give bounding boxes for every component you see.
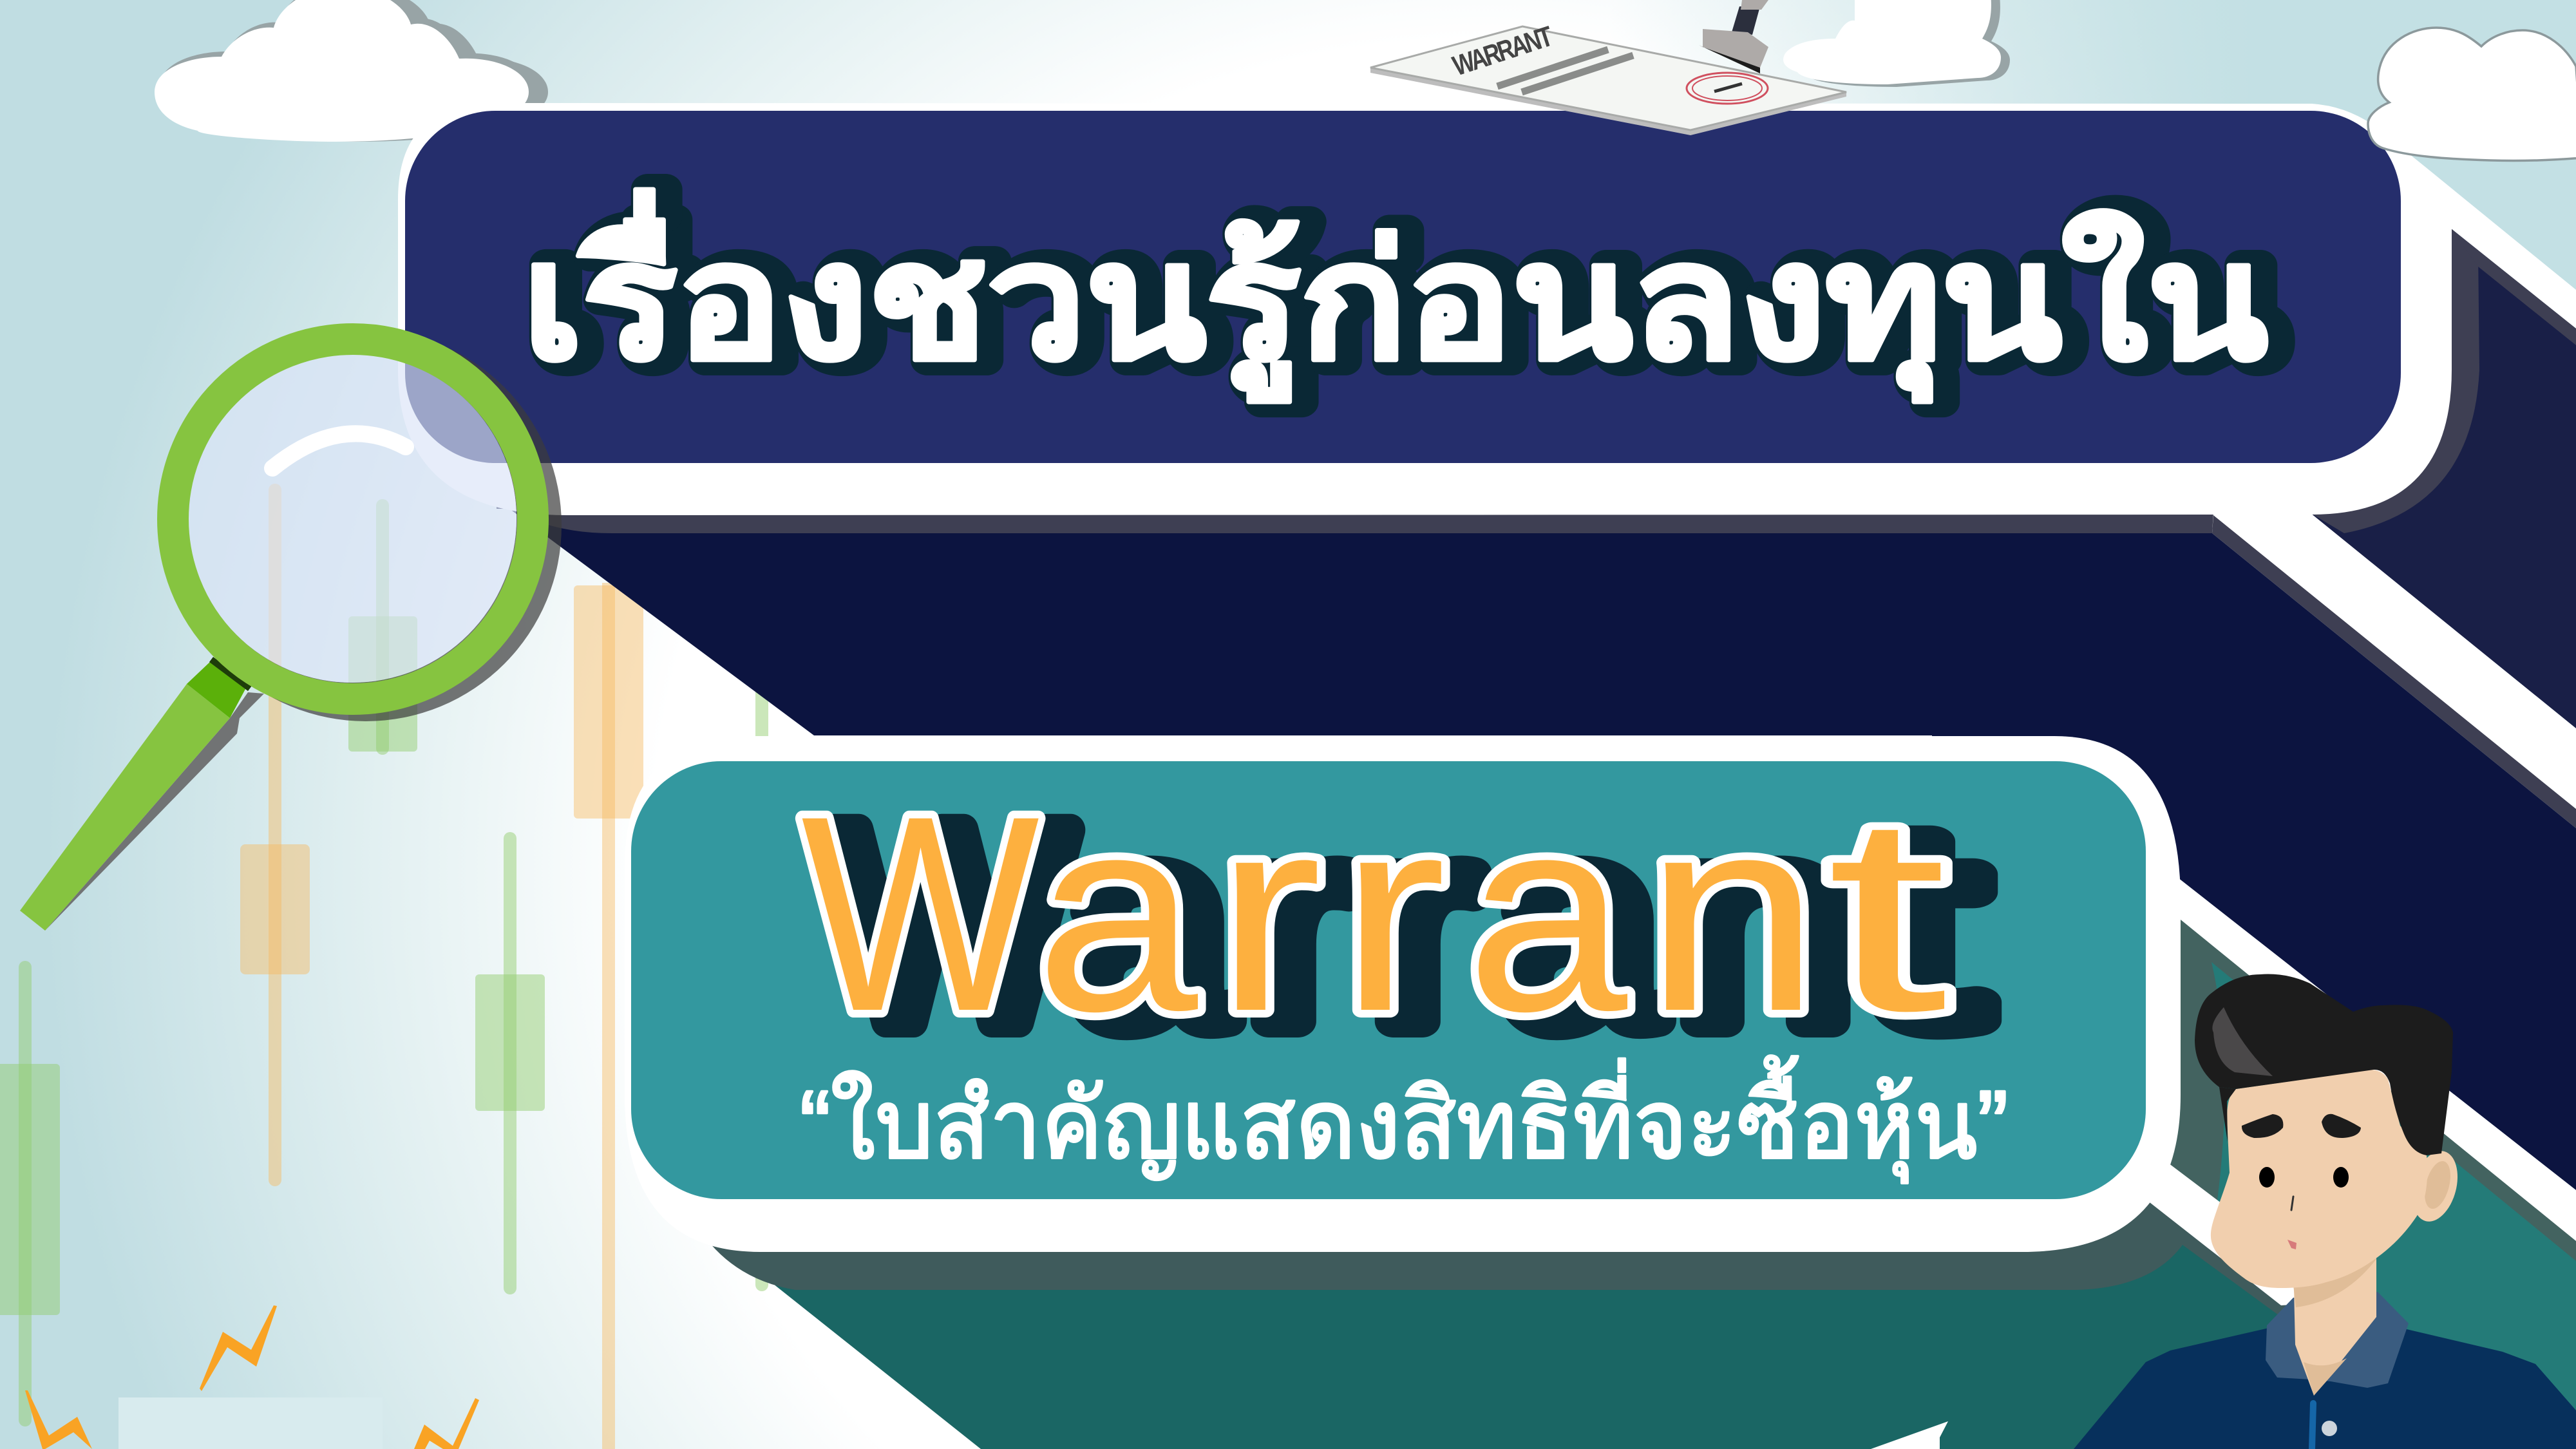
title text: เรื่องชวนรู้ก่อนลงทุนใน (522, 189, 2268, 402)
warrant heading shadow: r (1247, 770, 1354, 1081)
document label: WARRANT (1449, 21, 1557, 82)
neck (2293, 1249, 2376, 1396)
shirt (2074, 1328, 2576, 1449)
warrant heading: r (1339, 758, 1446, 1069)
panel: teal ribbon (694, 873, 2576, 1449)
icon: warrant document (1370, 21, 1846, 135)
title box shadow (497, 228, 2576, 828)
mouth (2287, 1240, 2297, 1249)
warrant heading shadow: W (833, 770, 1074, 1081)
panel: warrant box (625, 736, 2181, 1252)
warrant heading: r (1215, 758, 1322, 1069)
warrant heading shadow: a (1499, 770, 1662, 1081)
eyebrows (2242, 1114, 2361, 1138)
icon: stamp (1699, 0, 1768, 73)
warrant heading: a (1036, 758, 1200, 1069)
cloud: top left (155, 0, 548, 142)
white ribbon bands (2213, 122, 2576, 809)
hair (2195, 974, 2453, 1155)
panel: upper right dark stripe (2311, 228, 2576, 728)
cloud: top right (2368, 28, 2576, 161)
panel: navy ribbon (497, 499, 2576, 1190)
warrant heading: W (801, 758, 1042, 1069)
face (2211, 1070, 2427, 1288)
subtitle: “ใบสำคัญแสดงสิทธิที่จะซื้อหุ้น” (800, 1056, 2008, 1184)
icon: lightning bolts (25, 1305, 479, 1449)
nose (2291, 1197, 2293, 1210)
character: man (2074, 974, 2576, 1449)
warrant heading shadow: t (1859, 770, 1981, 1081)
collar (2266, 1292, 2409, 1388)
warrant heading shadow: r (1371, 770, 1479, 1081)
warrant heading shadow: a (1068, 770, 1232, 1081)
panel: title box (398, 103, 2452, 515)
warrant heading: t (1826, 758, 1949, 1069)
warrant heading: a (1466, 758, 1629, 1069)
candlestick chart (0, 484, 768, 1449)
icon: magnifying glass (20, 330, 562, 931)
warrant heading: n (1644, 758, 1821, 1069)
cloud: top centre (1783, 0, 2010, 87)
eyes (2259, 1167, 2349, 1188)
placket (2312, 1403, 2313, 1449)
title text shadow: เรื่องชวนรู้ก่อนลงทุนใน (535, 189, 2280, 402)
warrant heading shadow: n (1676, 770, 1853, 1081)
ear (2405, 1146, 2465, 1227)
